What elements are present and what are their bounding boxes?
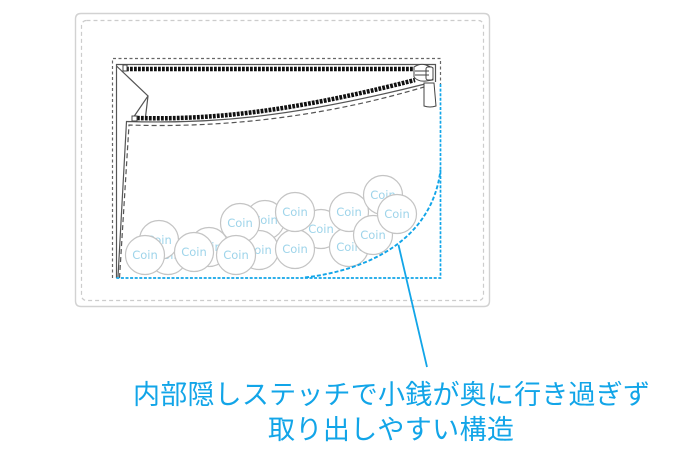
leader line bbox=[398, 245, 427, 367]
coin: Coin bbox=[384, 207, 410, 221]
coin bbox=[330, 192, 368, 232]
zipper upper teeth bbox=[126, 67, 415, 71]
zipper lower teeth bbox=[137, 80, 415, 118]
coin: Coin bbox=[308, 222, 334, 236]
coin: Coin bbox=[252, 213, 278, 227]
zipper slider and pull bbox=[414, 64, 436, 107]
coin bbox=[302, 210, 340, 248]
coin bbox=[174, 232, 214, 272]
coin bbox=[246, 200, 284, 240]
coin bbox=[364, 176, 402, 214]
coin: Coin bbox=[336, 240, 362, 254]
coin bbox=[216, 236, 256, 274]
coin bbox=[220, 204, 260, 242]
coin bbox=[354, 216, 392, 254]
coin: Coin bbox=[336, 205, 362, 219]
coin bbox=[190, 228, 228, 266]
coin bbox=[148, 236, 188, 274]
coin: Coin bbox=[196, 240, 222, 254]
blue dashed pocket edge bbox=[116, 84, 440, 278]
coin: Coin bbox=[370, 188, 396, 202]
pocket stitching (grey) bbox=[112, 58, 440, 278]
coin: Coin bbox=[223, 248, 249, 262]
coin: Coin bbox=[282, 205, 308, 219]
coin: Coin bbox=[246, 243, 272, 257]
caption line 2: 取り出しやすい構造 bbox=[268, 415, 514, 445]
blue dashed hidden stitch curve bbox=[305, 170, 440, 278]
coin: Coin bbox=[181, 245, 207, 259]
coins bbox=[126, 176, 416, 274]
caption line 1: 内部隠しステッチで小銭が奥に行き過ぎず bbox=[133, 380, 650, 410]
coin bbox=[126, 236, 164, 274]
coin: Coin bbox=[155, 248, 181, 262]
coin bbox=[330, 228, 368, 266]
coin: Coin bbox=[146, 233, 172, 247]
wallet outer stitching bbox=[82, 20, 484, 300]
coin bbox=[140, 220, 178, 260]
wallet outline bbox=[76, 14, 490, 306]
pocket opening frame and lines bbox=[116, 64, 436, 278]
coin: Coin bbox=[132, 248, 158, 262]
coin bbox=[276, 230, 314, 268]
zipper end stops bbox=[123, 65, 137, 121]
coin bbox=[378, 194, 416, 234]
coin bbox=[240, 230, 278, 270]
coin: Coin bbox=[360, 228, 386, 242]
coin: Coin bbox=[227, 216, 253, 230]
caption bbox=[133, 380, 650, 445]
coin bbox=[276, 192, 314, 232]
coin: Coin bbox=[282, 242, 308, 256]
